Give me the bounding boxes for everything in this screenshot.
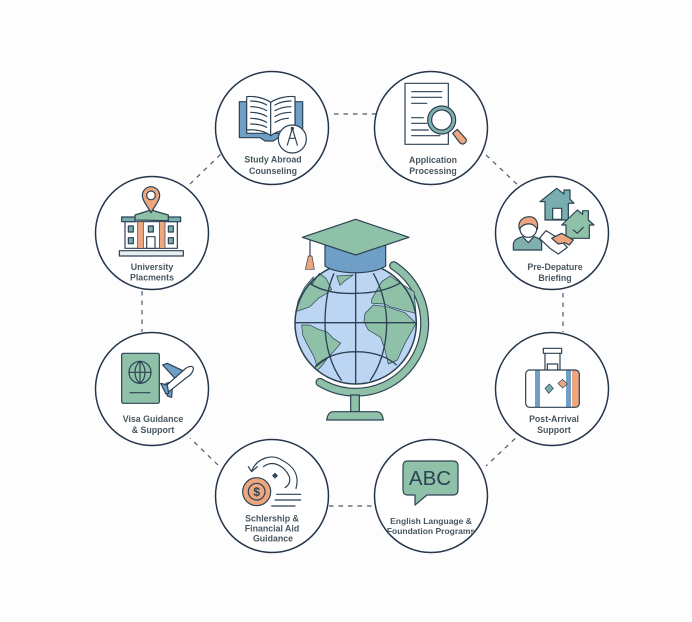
label: Study Abroad bbox=[244, 154, 302, 164]
south america bbox=[302, 325, 341, 367]
icon: coin with arrows: $ bbox=[253, 485, 260, 499]
icon: university building with pin bbox=[119, 187, 183, 256]
icon: document with magnifier bbox=[405, 83, 466, 144]
node: Pre-Departure Briefing bbox=[496, 176, 608, 290]
icon: passport and airplane bbox=[122, 353, 193, 403]
node: Scholarship & Financial Aid Guidance bbox=[216, 440, 328, 552]
africa bbox=[364, 305, 416, 364]
node: Study Abroad Counseling bbox=[216, 72, 328, 184]
node: University Placements bbox=[96, 176, 208, 290]
node: Application Processing: Processing bbox=[409, 166, 457, 176]
label: Application bbox=[409, 155, 457, 165]
globe sphere bbox=[295, 263, 416, 384]
node: Scholarship & Financial Aid Guidance: Financial Aid bbox=[245, 524, 299, 534]
label: University bbox=[131, 262, 173, 272]
node: Post-Arrival Support: Support bbox=[537, 425, 571, 435]
central globe with graduation cap bbox=[295, 219, 425, 420]
icon: suitcase bbox=[526, 348, 579, 407]
europe and asia bbox=[372, 276, 416, 313]
node: English Language & Foundation Programs bbox=[374, 440, 488, 552]
label: Visa Guidance bbox=[123, 414, 183, 424]
node: Visa Guidance & Support: & Support bbox=[132, 425, 174, 435]
icon: open book with compass bbox=[239, 96, 306, 153]
node: English Language & Foundation Programs: Foundation Programs bbox=[387, 526, 475, 536]
globe stand bbox=[320, 266, 425, 420]
node: Pre-Departure Briefing: Briefing bbox=[538, 273, 572, 283]
graduation cap bbox=[302, 219, 409, 273]
node: Study Abroad Counseling: Counseling bbox=[249, 166, 297, 176]
north america bbox=[296, 273, 332, 312]
node: Post-Arrival Support bbox=[496, 332, 608, 446]
icon: ABC speech bubble: ABC bbox=[409, 467, 451, 490]
label: Pre-Depature bbox=[527, 262, 583, 272]
label: Post-Arrival bbox=[529, 414, 579, 424]
node: Scholarship & Financial Aid Guidance: Guidance bbox=[253, 534, 293, 544]
node: Visa Guidance & Support bbox=[96, 332, 208, 446]
icon: person, houses and handshake bbox=[513, 188, 594, 254]
label: Schlership & bbox=[245, 514, 300, 524]
node: Application Processing bbox=[374, 72, 488, 184]
label: English Language & bbox=[390, 516, 472, 526]
node: University Placements: Placments bbox=[130, 272, 174, 282]
